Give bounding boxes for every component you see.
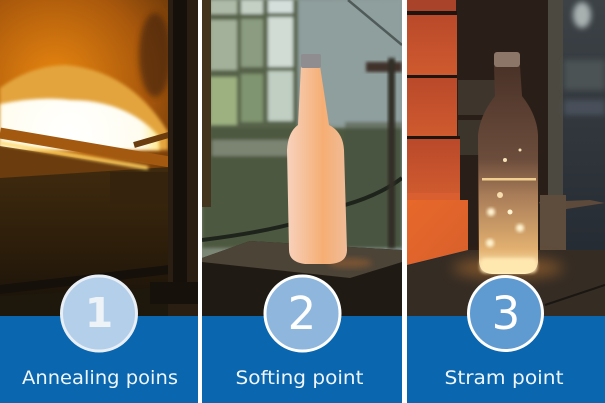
- number badge 1: [62, 276, 136, 351]
- number badge 3: [468, 276, 542, 350]
- number badge 2: 2: [288, 287, 316, 340]
- glowing bottle: [478, 52, 538, 274]
- panel: label band 2: [202, 316, 402, 403]
- bricks: [407, 0, 468, 265]
- label: Softing point: Softing point: [236, 367, 364, 389]
- label: Annealing poins: Annealing poins: [22, 367, 178, 389]
- panel: annealing furnace photo: [0, 0, 198, 316]
- bottle: [287, 54, 347, 264]
- blurred background: window and wall: [202, 0, 402, 248]
- panel: label band 3: [407, 316, 605, 403]
- panel: softening bottle photo: [202, 0, 402, 316]
- panel: label band 1: [0, 316, 198, 403]
- number badge 3: 3: [492, 287, 520, 340]
- panel: strain bottle photo: [407, 0, 605, 316]
- label: Stram point: Stram point: [444, 367, 564, 389]
- number badge 2: [265, 276, 340, 351]
- number badge 1: 1: [85, 289, 113, 337]
